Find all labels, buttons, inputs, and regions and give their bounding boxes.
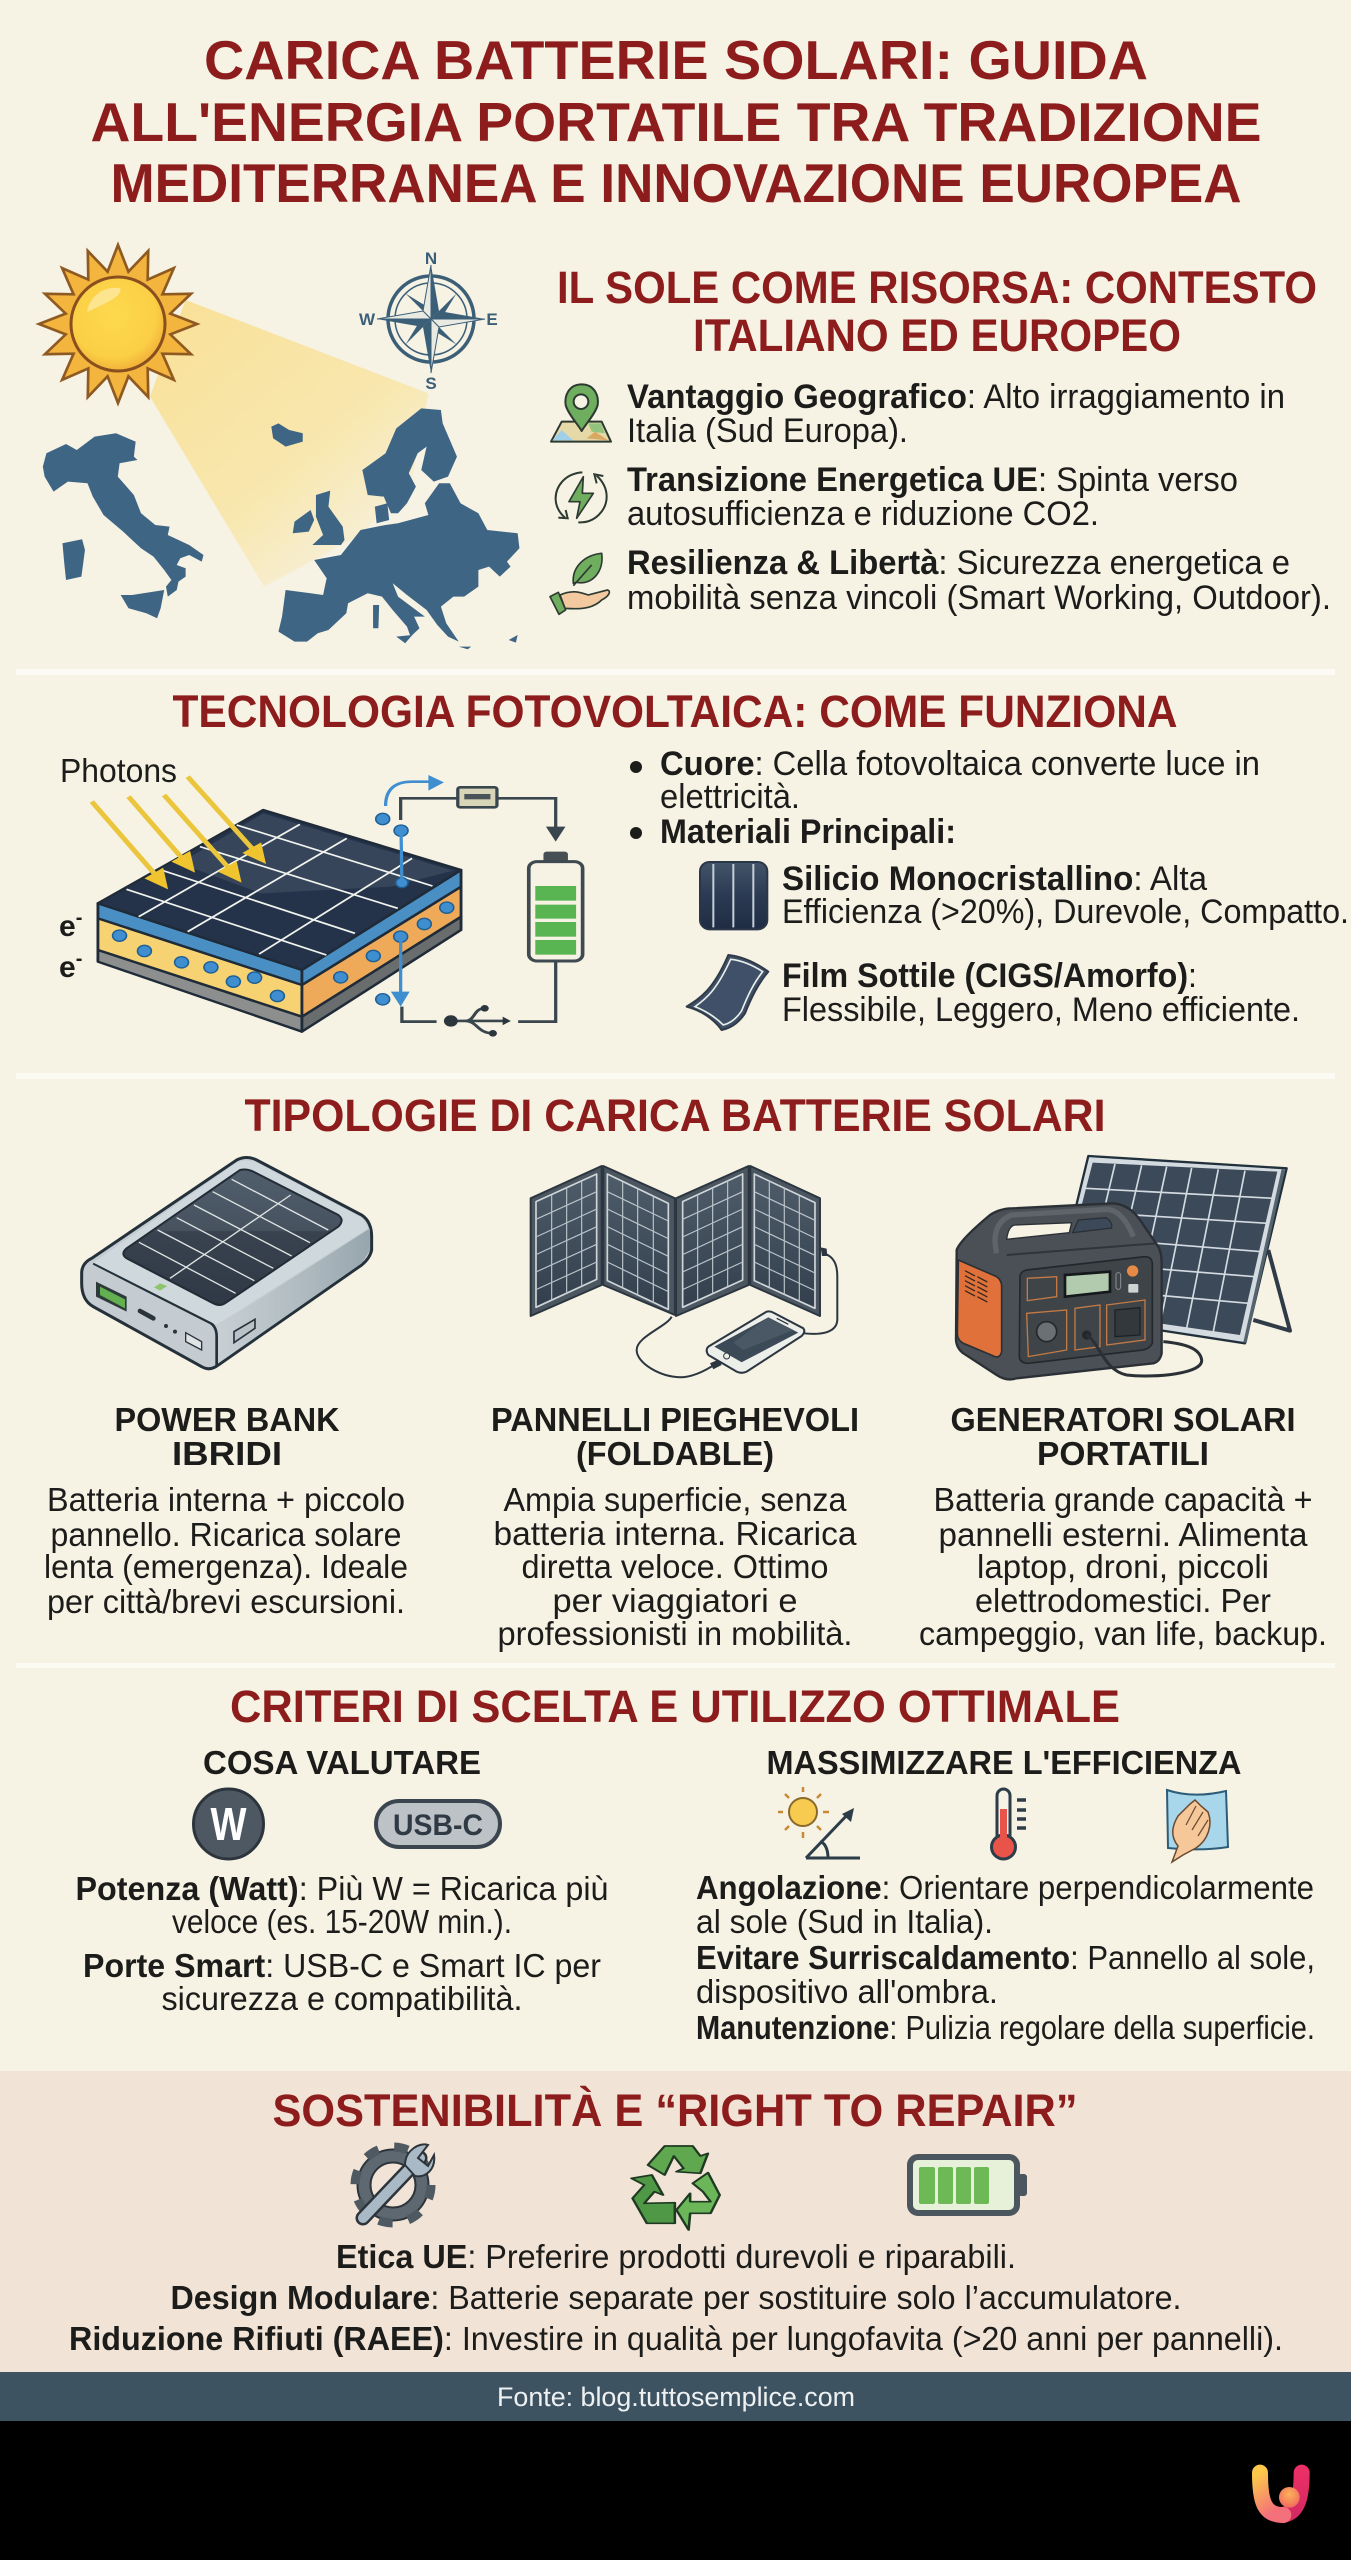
heading: IL SOLE COME RISORSA: CONTESTO: [557, 262, 1317, 313]
caption: generatori solari: PORTATILI: [1037, 1435, 1209, 1472]
caption: power bank ibridi: POWER BANK: [114, 1401, 340, 1438]
icon: compass rose: W: [359, 310, 376, 329]
panel: tecnologia fotovoltaica: [59, 686, 1349, 1037]
text: transizione energetica: Transizione Energetica UE: Spinta verso: [627, 461, 1238, 499]
map: Italy: [43, 433, 203, 618]
panel: criteri di scelta: [76, 1681, 1315, 2046]
label: electrons: e: [59, 951, 76, 984]
description: diretta veloce. Ottimo: [522, 1548, 828, 1585]
icon: sun angle: [778, 1787, 860, 1858]
icon: watt: [194, 1789, 264, 1859]
description: elettrodomestici. Per: [975, 1582, 1271, 1619]
icon: compass rose: [359, 249, 498, 393]
label: electrons: -: [76, 948, 82, 970]
text: design modulare: Design Modulare: Batterie separate per sostituire solo l’accumulatore.: [170, 2279, 1182, 2316]
icon: gear and wrench: [355, 2144, 434, 2223]
icon: logo: [1260, 2473, 1302, 2515]
text: angolazione: [696, 1869, 1314, 1940]
title: CARICA BATTERIE SOLARI: GUIDA: [204, 29, 1148, 91]
footer source bar: Fonte: blog.tuttosemplice.com: [497, 2382, 855, 2412]
current arrows: [386, 782, 430, 993]
panel: sostenibilità: [0, 2071, 1351, 2372]
description: per città/brevi escursioni.: [47, 1583, 405, 1620]
text: resilienza: Resilienza & Libertà: Sicurezza energetica e: [627, 544, 1290, 582]
caption: power bank ibridi: IBRIDI: [172, 1435, 282, 1472]
text: porte smart: Porte Smart: USB-C e Smart IC per: [83, 1947, 601, 1984]
description: batteria interna. Ricarica: [494, 1515, 857, 1552]
icon: thin film: [687, 955, 768, 1030]
text: resilienza: mobilità senza vincoli (Smart Working, Outdoor).: [627, 579, 1331, 617]
column: power bank: [44, 1157, 408, 1620]
text: potenza: [76, 1870, 608, 1940]
subheading: MASSIMIZZARE L'EFFICIENZA: [766, 1744, 1242, 1781]
column: massimizzare efficienza: [696, 1744, 1315, 2046]
battery: [529, 852, 583, 961]
text: silicio monocristallino: [782, 860, 1349, 931]
icon: foldable panels with phone: [531, 1166, 837, 1377]
caption: pannelli pieghevoli: (FOLDABLE): [576, 1435, 774, 1472]
text: cuore: Cuore: Cella fotovoltaica converte luce in: [660, 745, 1260, 783]
label: photons: Photons: [60, 752, 177, 789]
text: porte smart: [83, 1947, 601, 2017]
text: angolazione: Angolazione: Orientare perpendicolarmente: [696, 1869, 1314, 1906]
black bottom band with logo: [0, 2421, 1351, 2560]
description: [494, 1481, 857, 1652]
icon: battery: [910, 2157, 1027, 2213]
heading: [557, 262, 1317, 361]
text: evitare surriscaldamento: [696, 1939, 1315, 2010]
caption: pannelli pieghevoli: [491, 1401, 859, 1472]
description: campeggio, van life, backup.: [919, 1615, 1327, 1652]
description: pannelli esterni. Alimenta: [938, 1516, 1308, 1553]
column: cosa valutare: [76, 1744, 608, 2017]
circuit wires: [401, 798, 556, 1033]
electrons: [113, 813, 454, 1005]
text: resilienza: [627, 544, 1331, 617]
panel: tipologie: [44, 1090, 1327, 1652]
icon: usb-c: USB-C: [393, 1809, 483, 1842]
text: porte smart: sicurezza e compatibilità.: [162, 1980, 522, 2017]
text: vantaggio geografico: Vantaggio Geografico: Alto irraggiamento in: [627, 378, 1285, 416]
description: [919, 1481, 1327, 1652]
icon: compass rose: N: [425, 249, 437, 268]
title: ALL'ENERGIA PORTATILE TRA TRADIZIONE: [90, 91, 1262, 153]
icon: compass rose: E: [486, 310, 498, 329]
photon arrows: [92, 777, 266, 889]
icon: hand with leaf: [550, 553, 609, 614]
caption: power bank ibridi: [114, 1401, 340, 1472]
caption: generatori solari: [950, 1401, 1296, 1472]
icon: compass rose: S: [425, 374, 437, 393]
title: MEDITERRANEA E INNOVAZIONE EUROPEA: [110, 152, 1242, 214]
illustration: sun, compass and maps: [39, 245, 519, 649]
icon: map pin: [551, 384, 611, 442]
text: film sottile: Film Sottile (CIGS/Amorfo):: [782, 957, 1197, 995]
description: laptop, droni, piccoli: [977, 1548, 1269, 1585]
sunlight beam: [150, 300, 428, 587]
description: Batteria grande capacità +: [934, 1481, 1312, 1518]
text: film sottile: [782, 957, 1300, 1029]
title: [90, 29, 1262, 214]
description: Batteria interna + piccolo: [47, 1481, 405, 1518]
heading: SOSTENIBILITÀ E “RIGHT TO REPAIR”: [272, 2085, 1078, 2136]
text: cuore: elettricità.: [660, 778, 800, 816]
icon: watt: W: [210, 1798, 247, 1850]
text: etica ue: Etica UE: Preferire prodotti durevoli e riparabili.: [336, 2238, 1016, 2275]
icon: recycle: [632, 2146, 720, 2230]
footer source bar: [0, 2372, 1351, 2421]
description: [44, 1481, 408, 1620]
panel background: [0, 2071, 1351, 2372]
icon: solar generator: [956, 1156, 1290, 1379]
text: silicio monocristallino: Silicio Monocristallino: Alta: [782, 860, 1207, 898]
text: riduzione rifiuti: Riduzione Rifiuti (RAEE): Investire in qualità per lungofavita (>20 anni per pannelli).: [69, 2320, 1283, 2357]
solar cell layers: [98, 810, 461, 1032]
map: Europe: [271, 408, 519, 649]
text: film sottile: Flessibile, Leggero, Meno efficiente.: [782, 991, 1300, 1029]
heading: TIPOLOGIE DI CARICA BATTERIE SOLARI: [244, 1090, 1106, 1141]
description: professionisti in mobilità.: [498, 1615, 852, 1652]
icon: monocrystalline cell: [700, 862, 767, 929]
panel: il sole come risorsa: [550, 262, 1331, 617]
icon: energy transition: [556, 472, 607, 522]
text: evitare surriscaldamento: Evitare Surriscaldamento: Pannello al sole,: [696, 1939, 1315, 1976]
caption: pannelli pieghevoli: PANNELLI PIEGHEVOLI: [491, 1401, 859, 1438]
description: per viaggiatori e: [552, 1582, 798, 1619]
column: generatori solari: [919, 1156, 1327, 1652]
heading: CRITERI DI SCELTA E UTILIZZO OTTIMALE: [230, 1681, 1120, 1732]
label: electrons: e: [59, 910, 76, 943]
text: transizione energetica: [627, 461, 1238, 533]
icon: cleaning cloth: [1167, 1790, 1228, 1862]
text: potenza: veloce (es. 15-20W min.).: [172, 1903, 512, 1940]
text: evitare surriscaldamento: dispositivo all'ombra.: [696, 1973, 998, 2010]
diagram: solar cell circuit: [59, 752, 583, 1037]
description: pannello. Ricarica solare: [50, 1516, 402, 1553]
icon: usb-c: [376, 1801, 500, 1847]
text: potenza: Potenza (Watt): Più W = Ricarica più: [76, 1870, 608, 1907]
icon: sun: [39, 245, 197, 403]
label: electrons: -: [76, 907, 82, 929]
label: electrons: [59, 907, 82, 984]
subheading: COSA VALUTARE: [203, 1744, 481, 1781]
description: Ampia superficie, senza: [504, 1481, 847, 1518]
text: vantaggio geografico: [627, 378, 1285, 450]
icon: power bank: [82, 1157, 372, 1369]
text: transizione energetica: autosufficienza e riduzione CO2.: [627, 495, 1099, 533]
column: pannelli pieghevoli: [491, 1166, 859, 1652]
heading: TECNOLOGIA FOTOVOLTAICA: COME FUNZIONA: [172, 686, 1178, 737]
description: lenta (emergenza). Ideale: [44, 1548, 408, 1585]
usb connector: [458, 787, 497, 807]
text: materiali principali: Materiali Principali:: [660, 813, 956, 851]
text: angolazione: al sole (Sud in Italia).: [696, 1903, 993, 1940]
caption: generatori solari: GENERATORI SOLARI: [950, 1401, 1296, 1438]
text: cuore: [630, 745, 1260, 816]
text: vantaggio geografico: Italia (Sud Europa).: [627, 412, 908, 450]
heading: ITALIANO ED EUROPEO: [693, 310, 1181, 361]
icon: thermometer: [992, 1789, 1026, 1859]
